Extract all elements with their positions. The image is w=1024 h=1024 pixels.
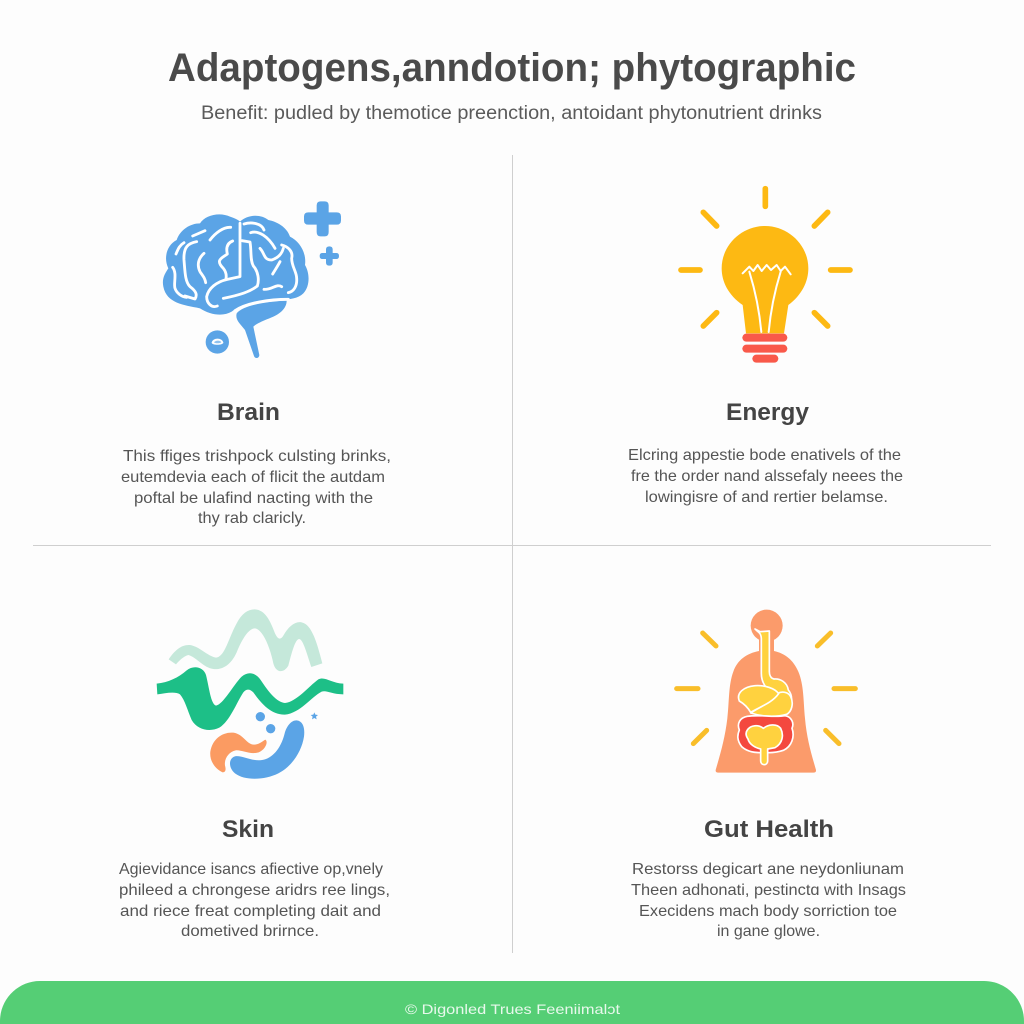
text: skin description: dometived brirnce.	[181, 923, 319, 940]
text: energy description: fre the order nand alssefaly neees the	[631, 468, 903, 485]
text: brain description: poftal be ulafind nacting with the	[134, 490, 373, 507]
text: gut health description: in gane glowe.	[717, 923, 820, 940]
text: skin description: Agievidance isancs afiective op,vnely	[119, 861, 383, 878]
text: gut health description: Restorss degicart ane neydonliunam	[632, 861, 904, 878]
text: gut health description: Theen adhonati, pestinctɑ with Insags	[631, 882, 906, 899]
icon: digestive system	[677, 610, 855, 773]
heading: Brain: Brain	[217, 399, 280, 426]
heading: Skin: Skin	[222, 816, 274, 843]
text: skin description	[119, 861, 390, 940]
text: skin description: and riece freat completing dait and	[120, 903, 381, 920]
text: brain description: thy rab claricly.	[198, 510, 306, 527]
panel: skin	[119, 609, 390, 940]
text: brain description	[121, 448, 391, 527]
text: brain description: This ffiges trishpock culsting brinks,	[123, 448, 391, 465]
heading: Energy: Energy	[726, 399, 810, 426]
text: skin description: phileed a chrongese aridrs ree lings,	[119, 882, 390, 899]
panel: brain	[121, 201, 391, 527]
text: energy description	[628, 447, 903, 506]
text: gut health description: Execidens mach body sorriction toe	[639, 903, 897, 920]
panel: energy	[628, 189, 903, 506]
footer text: © Digonled Trues Feeniimalɔt	[405, 1001, 620, 1017]
text: energy description: lowingisre of and rertier belamse.	[645, 489, 888, 506]
text: gut health description	[631, 861, 906, 940]
text: energy description: Elcring appestie bode enativels of the	[628, 447, 901, 464]
title: Adaptogens,anndotion; phytographic	[168, 46, 856, 90]
icon: brain	[163, 201, 341, 358]
icon: skin waves	[157, 609, 343, 779]
icon: light bulb	[681, 189, 850, 363]
text: brain description: eutemdevia each of flicit the autdam	[121, 469, 385, 486]
panel: gut health	[631, 610, 906, 940]
subtitle: Benefit: pudled by themotice preenction, antoidant phytonutrient drinks	[201, 103, 822, 124]
heading: Gut Health: Gut Health	[704, 816, 834, 843]
footer band	[0, 981, 1024, 1024]
